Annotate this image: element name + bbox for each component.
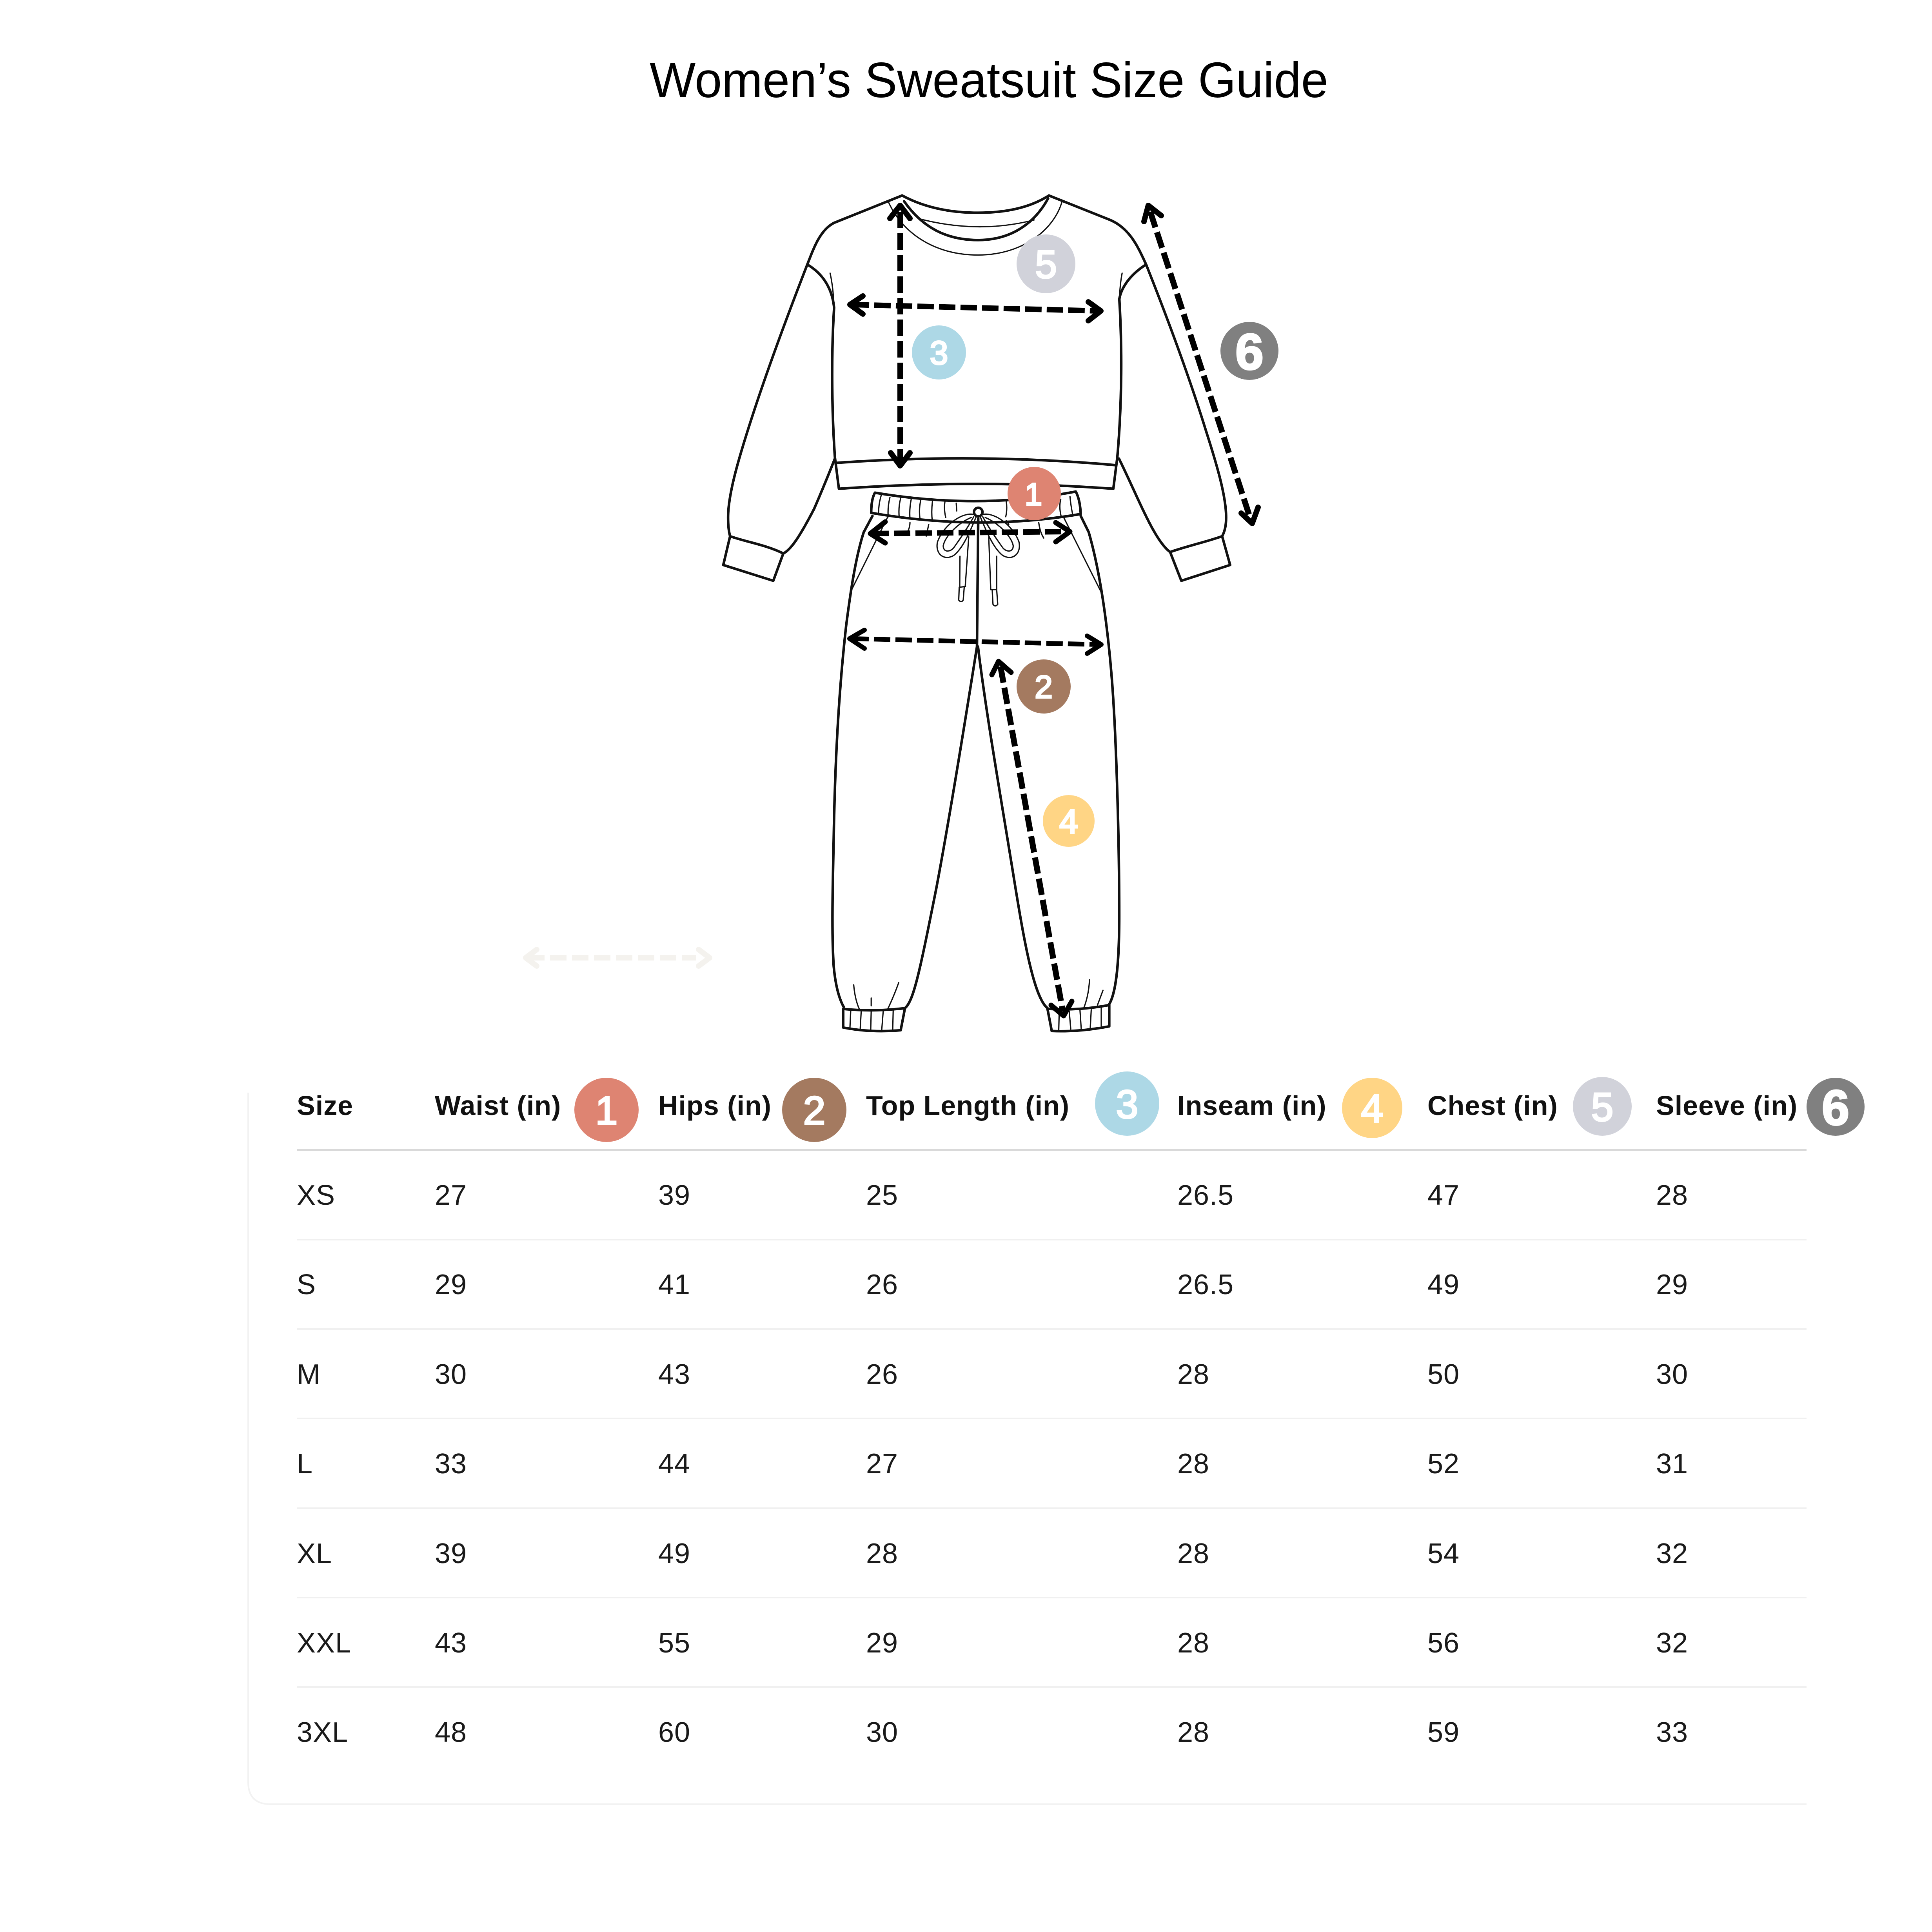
table row M [297, 1359, 1688, 1390]
table row S: 26.5 [1177, 1269, 1234, 1300]
table header row: Hips (in) [658, 1090, 772, 1121]
sweatshirt line drawing [723, 196, 1230, 581]
arrow: sleeve length [1144, 205, 1258, 523]
table row XS: 25 [866, 1180, 898, 1211]
header badge 1 [574, 1078, 639, 1142]
table row XS: 39 [658, 1180, 690, 1211]
table row XL: 39 [435, 1538, 467, 1569]
badge 4 on pants: inseam [1043, 795, 1095, 847]
table header row: Top Length (in) [866, 1090, 1070, 1121]
badge 5 on sweatshirt: chest: 5 [1035, 243, 1057, 287]
table row L [297, 1448, 1688, 1480]
arrow: waist width [870, 522, 1070, 543]
header badge 6 [1807, 1078, 1865, 1136]
header badge 6: 6 [1822, 1080, 1849, 1135]
table row 3XL: 33 [1656, 1717, 1688, 1748]
badge 1 on waistband: 1 [1025, 477, 1042, 512]
table row L: 52 [1427, 1448, 1460, 1480]
table row XXL: 32 [1656, 1627, 1688, 1659]
table row XS: XS [297, 1180, 335, 1211]
header badge 3 [1095, 1071, 1159, 1136]
table row XL: XL [297, 1538, 332, 1569]
badge 4 on pants: inseam: 4 [1059, 803, 1078, 841]
table header row [297, 1090, 1798, 1121]
table row L: 31 [1656, 1448, 1688, 1480]
table row S: 41 [658, 1269, 690, 1300]
arrow: chest width [850, 296, 1101, 321]
table row S: 49 [1427, 1269, 1460, 1300]
table row M: M [297, 1359, 321, 1390]
table row S: 26 [866, 1269, 898, 1300]
table header row: Sleeve (in) [1656, 1090, 1798, 1121]
table row XXL: 43 [435, 1627, 467, 1659]
table rules [297, 1149, 1807, 1688]
table row 3XL: 3XL [297, 1717, 348, 1748]
table row 3XL: 30 [866, 1717, 898, 1748]
table row 3XL [297, 1717, 1688, 1748]
table row XL: 28 [866, 1538, 898, 1569]
table row L: 28 [1177, 1448, 1209, 1480]
badge 1 on waistband [1008, 467, 1061, 520]
table row XS: 26.5 [1177, 1180, 1234, 1211]
header badge 1: 1 [596, 1088, 617, 1133]
table header row: Waist (in) [435, 1090, 561, 1121]
table row XXL: 55 [658, 1627, 690, 1659]
table row XL [297, 1538, 1688, 1569]
table card outline [248, 1093, 1807, 1804]
arrow: inseam [992, 661, 1072, 1016]
table row M: 30 [1656, 1359, 1688, 1390]
table row S: S [297, 1269, 316, 1300]
table row XS: 28 [1656, 1180, 1688, 1211]
table row 3XL: 28 [1177, 1717, 1209, 1748]
table row M: 43 [658, 1359, 690, 1390]
table row S: 29 [435, 1269, 467, 1300]
table row XS: 47 [1427, 1180, 1460, 1211]
table header row: Inseam (in) [1177, 1090, 1327, 1121]
table row 3XL: 60 [658, 1717, 690, 1748]
table row L: 44 [658, 1448, 690, 1480]
table row M: 50 [1427, 1359, 1460, 1390]
table row XXL: 28 [1177, 1627, 1209, 1659]
badge 5 on sweatshirt: chest [1017, 234, 1075, 293]
table header row: Chest (in) [1427, 1090, 1558, 1121]
table header row: Size [297, 1090, 353, 1121]
title: Women’s Sweatsuit Size Guide [650, 52, 1328, 108]
table row S [297, 1269, 1688, 1300]
table row XL: 54 [1427, 1538, 1460, 1569]
badge 2 on pants: hips: 2 [1035, 669, 1053, 705]
table row XS: 27 [435, 1180, 467, 1211]
header badge 5 [1573, 1077, 1632, 1136]
table row L: L [297, 1448, 313, 1480]
header badge 4 [1342, 1078, 1402, 1138]
table row XL: 32 [1656, 1538, 1688, 1569]
table row XXL: 56 [1427, 1627, 1460, 1659]
header badge 3: 3 [1116, 1082, 1138, 1127]
table row XXL [297, 1627, 1688, 1659]
badge 3 on sweatshirt: top length [912, 325, 966, 380]
arrow: top length [890, 205, 910, 466]
table row XL: 28 [1177, 1538, 1209, 1569]
arrow: hip width [850, 630, 1101, 654]
table row XL: 49 [658, 1538, 690, 1569]
header badge 2: 2 [803, 1088, 825, 1133]
table row 3XL: 59 [1427, 1717, 1460, 1748]
badge 6 beside sleeve [1220, 322, 1278, 380]
table row XXL: XXL [297, 1627, 351, 1659]
table row M: 28 [1177, 1359, 1209, 1390]
badge 6 beside sleeve: 6 [1235, 323, 1264, 380]
badge 3 on sweatshirt: top length: 3 [930, 334, 948, 371]
badge 2 on pants: hips [1017, 659, 1071, 714]
table row S: 29 [1656, 1269, 1688, 1300]
table row XXL: 29 [866, 1627, 898, 1659]
sweatpants line drawing [832, 492, 1119, 1031]
arrow: faded unused dimension [526, 950, 710, 966]
header badge 4: 4 [1361, 1086, 1383, 1131]
table row L: 27 [866, 1448, 898, 1480]
header badge 5: 5 [1591, 1085, 1613, 1129]
table row M: 26 [866, 1359, 898, 1390]
table row XS [297, 1180, 1688, 1211]
table row L: 33 [435, 1448, 467, 1480]
header badge 2 [782, 1078, 846, 1142]
table row 3XL: 48 [435, 1717, 467, 1748]
table row M: 30 [435, 1359, 467, 1390]
